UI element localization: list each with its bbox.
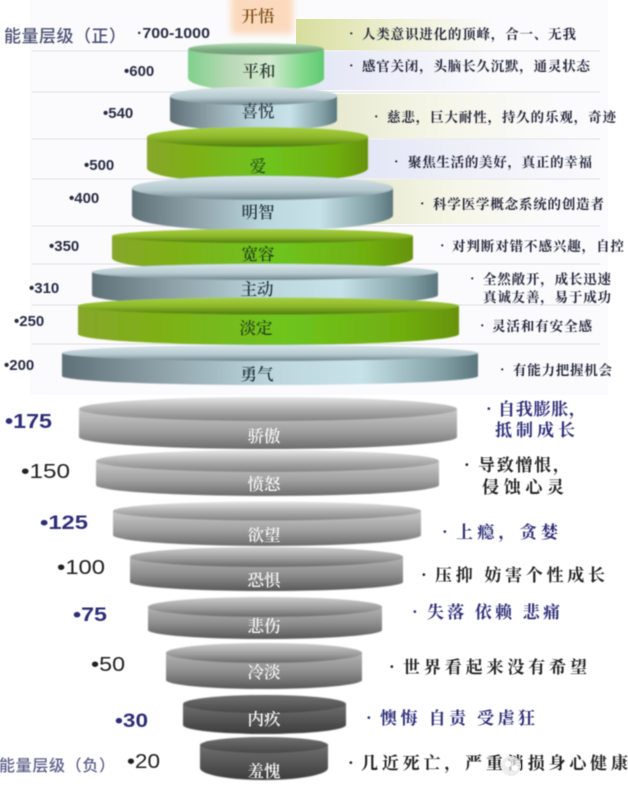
energy level numbers: •500 (84, 157, 114, 174)
disc: 骄傲 (79, 397, 457, 449)
disc: 喜悦 (170, 87, 337, 131)
energy level numbers: •540 (103, 105, 133, 122)
descriptions: positive levels: 感官关闭，头脑长久沉默，通灵状态 (362, 58, 592, 75)
disc labels: 羞愧 (248, 762, 281, 781)
disc labels: 欲望 (248, 525, 280, 545)
disc labels: 冷淡 (248, 662, 281, 682)
disc: 羞愧 (200, 737, 328, 780)
disc labels: 骄傲 (248, 427, 281, 446)
upper positive discs (62, 0, 478, 385)
watermark (501, 756, 521, 776)
energy level numbers: •400 (69, 190, 99, 207)
descriptions: negative levels: 上瘾，贪婪 (456, 522, 559, 543)
descriptions: positive levels: 有能力把握机会 (513, 362, 612, 378)
heading: positive energy levels: 能量层级（正） (4, 27, 126, 46)
disc labels: 平和 (242, 62, 276, 81)
disc: 开悟 (231, 0, 293, 34)
energy level numbers: •175 (5, 411, 52, 433)
descriptions: negative levels: 导致憎恨， (478, 456, 570, 476)
energy level numbers: •75 (73, 605, 108, 626)
descriptions: negative levels: · (464, 455, 470, 474)
descriptions: positive levels: 真诚友善，易于成功 (483, 289, 612, 306)
energy level numbers: •250 (14, 313, 44, 330)
disc labels: 愤怒 (248, 474, 282, 494)
disc labels: 恐惧 (248, 571, 281, 590)
descriptions: positive levels (349, 26, 624, 378)
right-hand background bands (32, 19, 600, 344)
energy level numbers: •125 (40, 513, 89, 534)
descriptions: positive levels: · (440, 238, 445, 253)
disc: 勇气 (62, 345, 478, 385)
disc labels: 勇气 (240, 365, 274, 384)
disc: 恐惧 (130, 547, 403, 591)
descriptions: positive levels: 聚焦生活的美好，真正的幸福 (408, 154, 592, 171)
descriptions: negative levels: · (389, 657, 395, 676)
disc: 内疚 (183, 695, 346, 734)
descriptions: negative levels: 侵蚀心灵 (482, 477, 564, 497)
disc: 欲望 (113, 502, 421, 546)
descriptions: negative levels: · (412, 602, 418, 621)
descriptions: negative levels: 压抑 妨害个性成长 (435, 565, 605, 585)
disc labels: 爱 (250, 157, 266, 176)
energy level numbers: •310 (29, 280, 59, 297)
energy level numbers: •350 (49, 238, 79, 255)
disc labels: 主动 (240, 280, 274, 299)
descriptions: negative levels: 自我膨胀， (498, 400, 586, 420)
descriptions: positive levels: · (374, 109, 379, 124)
descriptions: negative levels: · (486, 399, 492, 418)
disc: 宽容 (112, 229, 413, 272)
energy level numbers: •150 (21, 461, 70, 483)
descriptions: negative levels: 失落 依赖 悲痛 (427, 602, 560, 622)
disc labels: 淡定 (240, 319, 272, 338)
energy level numbers: •20 (127, 751, 160, 773)
disc: 愤怒 (96, 450, 439, 496)
descriptions: positive levels: 人类意识进化的顶峰，合一、无我 (362, 26, 576, 43)
disc labels: 宽容 (242, 245, 275, 264)
descriptions: positive levels: 慈悲，巨大耐性，持久的乐观，奇迹 (387, 109, 618, 126)
disc labels: 开悟 (242, 7, 275, 26)
descriptions: negative levels: 世界看起来没有希望 (403, 657, 587, 677)
descriptions: positive levels: 灵活和有安全感 (492, 318, 594, 334)
lower negative discs (79, 397, 457, 780)
descriptions: positive levels: · (470, 271, 475, 286)
descriptions: positive levels: · (394, 154, 399, 169)
energy level numbers: •200 (4, 357, 34, 374)
descriptions: negative levels: · (421, 565, 427, 584)
descriptions: negative levels: 懊悔 自责 受虐狂 (380, 708, 535, 728)
heading: negative energy levels: 能量层级（负） (0, 757, 115, 775)
descriptions: negative levels (348, 399, 628, 774)
descriptions: positive levels: · (480, 318, 485, 333)
disc: 爱 (147, 127, 368, 183)
energy level numbers: •50 (91, 654, 125, 676)
descriptions: positive levels: · (420, 196, 425, 211)
descriptions: negative levels: 抵制成长 (495, 420, 575, 440)
disc labels: 内疚 (248, 710, 281, 729)
disc: 悲伤 (148, 597, 382, 639)
descriptions: negative levels: · (442, 522, 448, 541)
descriptions: positive levels: 全然敞开，成长迅速 (483, 271, 612, 288)
energy level numbers: •600 (124, 63, 154, 80)
energy level numbers: •100 (57, 557, 105, 579)
disc: 主动 (92, 264, 438, 306)
disc: 平和 (188, 43, 324, 91)
descriptions: negative levels: 几近死亡，严重消损身心健康 (361, 753, 628, 774)
disc: 淡定 (78, 298, 459, 345)
descriptions: negative levels: · (366, 708, 372, 727)
descriptions: positive levels: · (349, 58, 354, 73)
disc: 冷淡 (166, 643, 362, 689)
descriptions: positive levels: 对判断对错不感兴趣，自控 (452, 238, 624, 255)
descriptions: positive levels: 科学医学概念系统的创造者 (433, 196, 604, 212)
descriptions: positive levels: · (500, 362, 505, 377)
energy level numbers (4, 25, 210, 773)
disc labels (240, 7, 282, 781)
energy level numbers: •30 (115, 711, 148, 732)
disc labels: 悲伤 (248, 617, 280, 636)
energy level numbers: ·700-1000 (137, 25, 210, 42)
disc labels: 明智 (242, 203, 274, 222)
descriptions: negative levels: · (348, 753, 354, 772)
descriptions: positive levels: · (349, 26, 354, 41)
disc labels: 喜悦 (242, 102, 275, 121)
disc: 明智 (132, 176, 393, 231)
